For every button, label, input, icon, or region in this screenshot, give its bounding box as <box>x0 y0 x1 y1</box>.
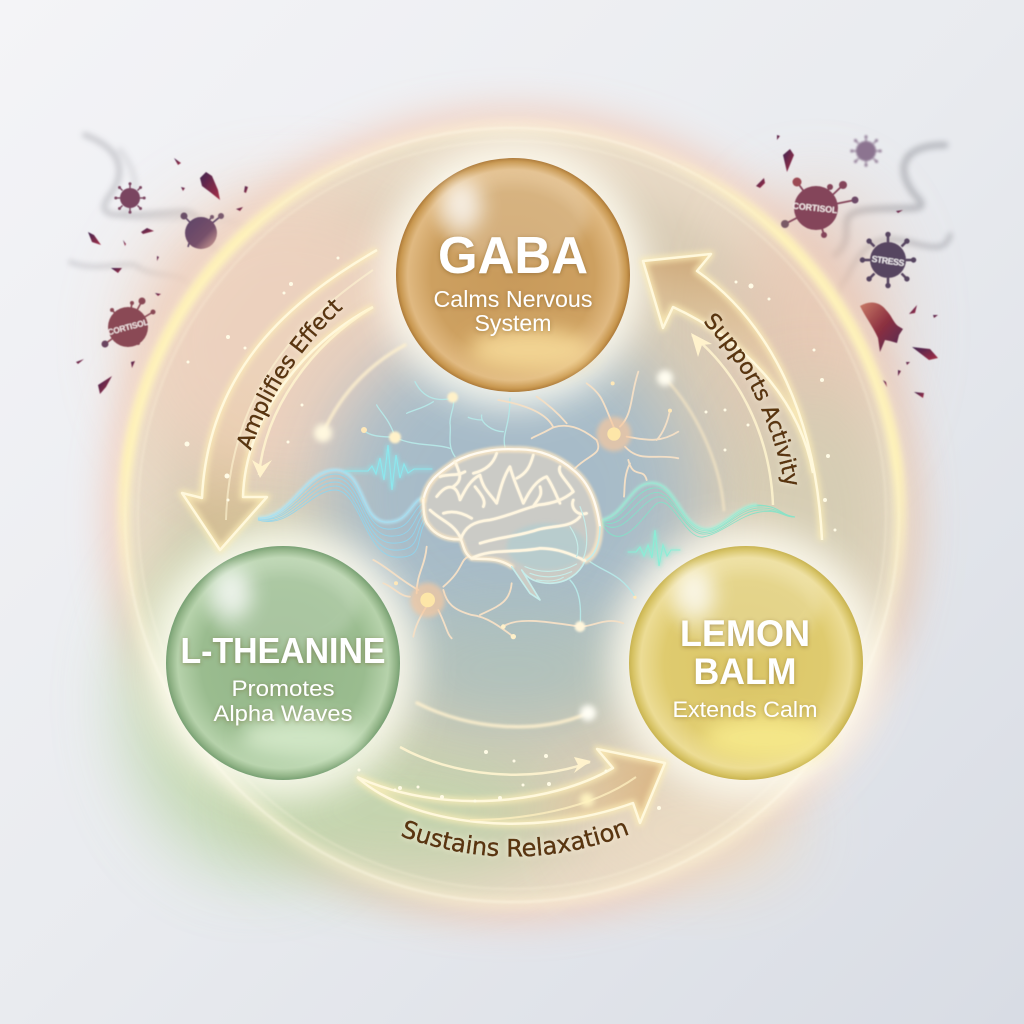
virus: left cortisol: CORTISOL <box>106 317 150 337</box>
virus: left cortisol <box>102 298 156 348</box>
virus: right cortisol: CORTISOL <box>792 201 838 215</box>
neurons <box>361 372 678 639</box>
smoke: left <box>70 135 260 288</box>
label: supports activity: Supports Activity <box>704 312 798 485</box>
glowing disc backdrop <box>104 107 920 923</box>
debris <box>76 135 938 398</box>
description: Lemon Balm: Extends Calm <box>672 697 818 722</box>
neuron cell bodies <box>361 381 672 639</box>
ECG pulses <box>345 445 680 566</box>
brain wave: left <box>258 470 425 557</box>
outer glowing ring <box>124 127 900 903</box>
label: amplifies effect: Amplifies Effect <box>237 300 344 451</box>
sphere glows <box>149 143 880 797</box>
brain wave: right <box>602 483 795 537</box>
label line two: Lemon Balm: BALM <box>694 651 796 692</box>
virus: right stress: STRESS <box>871 254 905 268</box>
sphere: L-Theanine <box>166 546 400 780</box>
virus: left small <box>114 182 146 214</box>
label: sustains relaxation: Sustains Relaxation <box>402 818 628 858</box>
sphere: GABA <box>396 158 630 392</box>
sphere: Lemon Balm <box>629 546 863 780</box>
warm neuron branches <box>373 372 678 638</box>
arrow: sustains relaxation <box>355 744 669 858</box>
virus: left large <box>180 212 224 249</box>
description line two: L-Theanine: Alpha Waves <box>214 701 352 726</box>
description: L-Theanine: Promotes <box>232 676 334 701</box>
splat: right <box>860 303 903 352</box>
smoke: right <box>835 145 950 295</box>
virus: right faint <box>850 135 882 167</box>
cerebellum <box>525 507 587 581</box>
arrow: supports activity <box>639 250 826 540</box>
sparkles <box>184 256 836 810</box>
virus: right stress <box>860 232 916 288</box>
description: GABA: Calms Nervous <box>434 286 592 312</box>
brain <box>423 449 600 600</box>
teal neuron branches <box>363 382 635 627</box>
arrow: amplifies effect <box>178 249 378 554</box>
brain folds <box>430 453 587 561</box>
inner comet arcs <box>314 345 724 727</box>
label: GABA: GABA <box>438 227 588 285</box>
virus: right cortisol <box>781 178 858 238</box>
description line two: GABA: System <box>474 310 552 336</box>
label: L-Theanine: L-THEANINE <box>180 630 386 671</box>
label: Lemon Balm: LEMON <box>680 613 810 654</box>
